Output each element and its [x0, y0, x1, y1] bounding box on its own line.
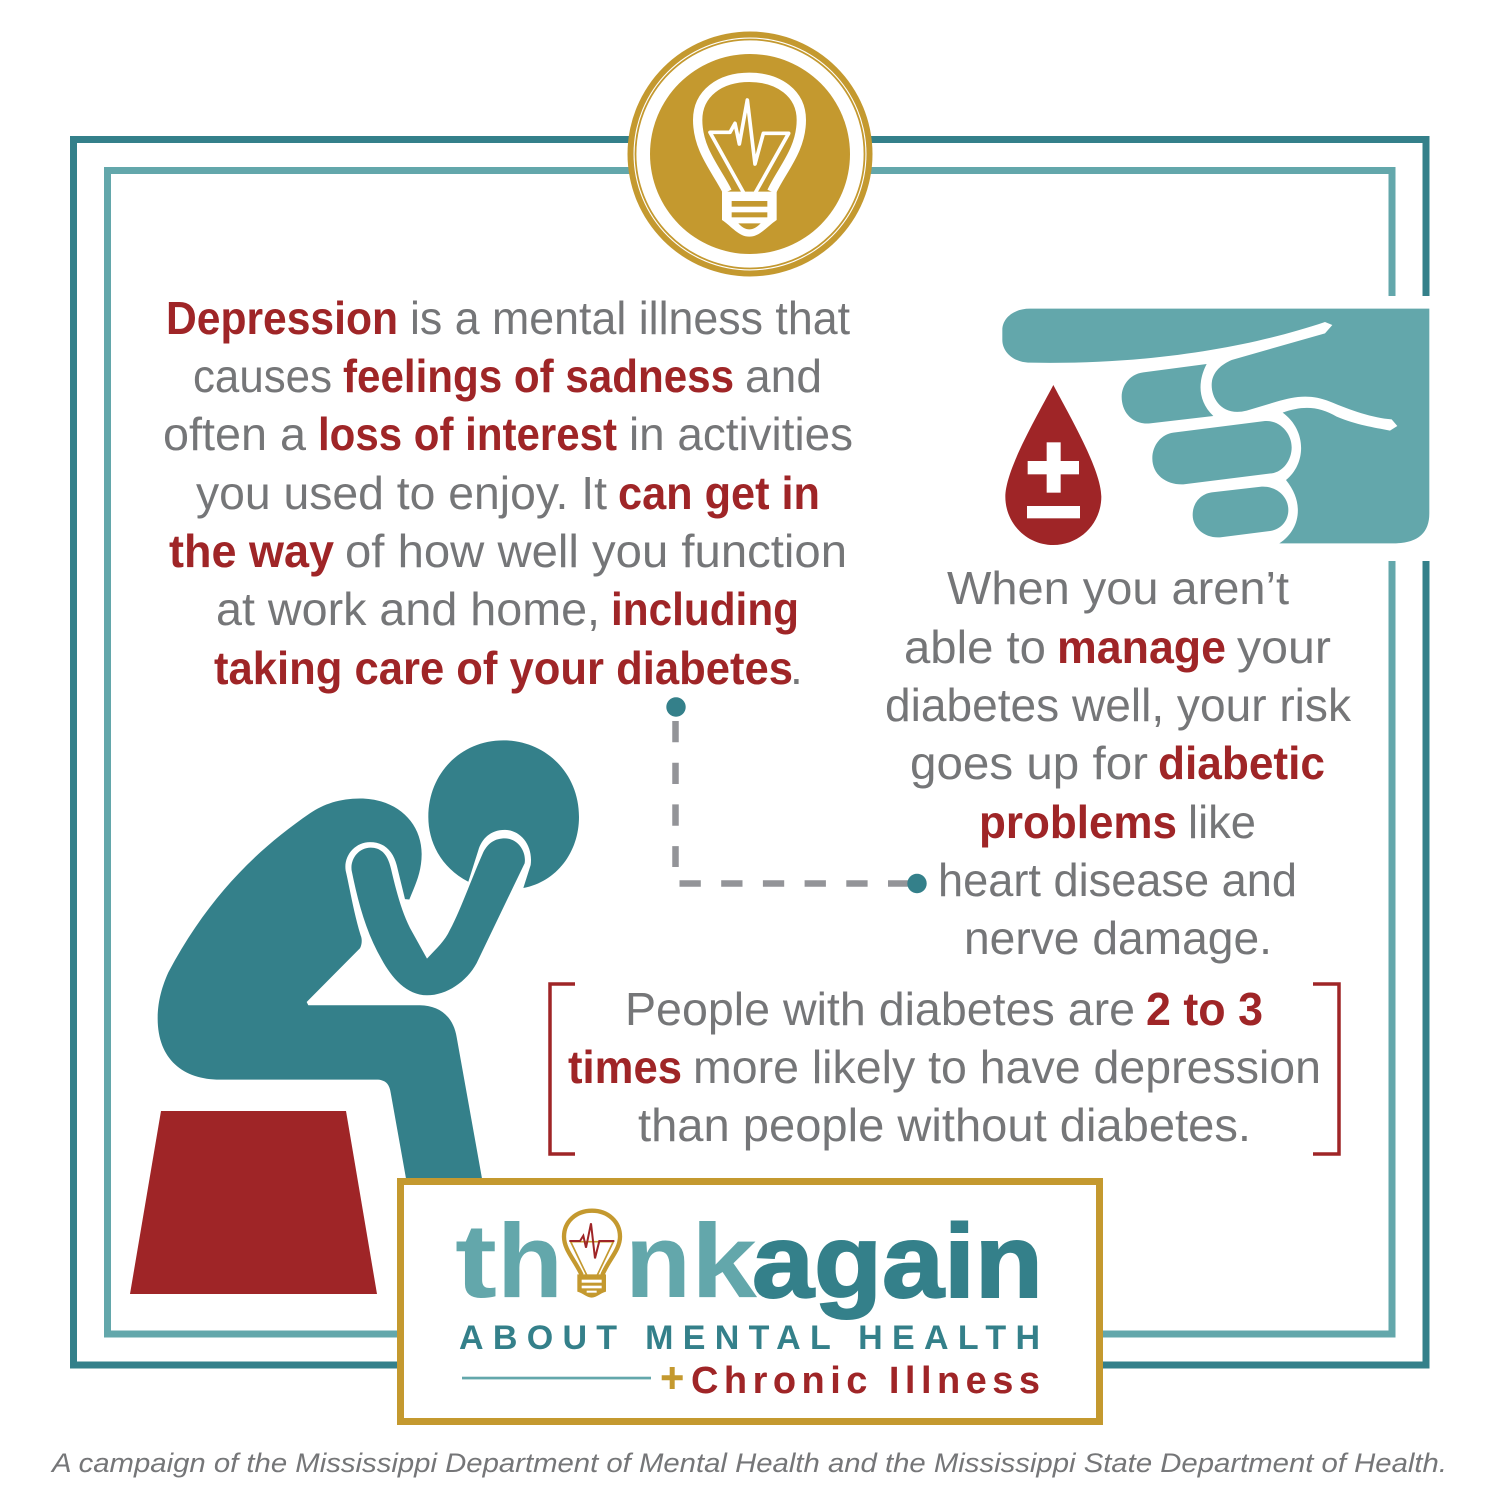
statistic text	[568, 983, 1321, 1151]
red stool	[130, 1111, 377, 1294]
paragraph: risk of diabetic problems: diabetes well, your risk	[885, 679, 1352, 731]
paragraph: what depression is: causes	[193, 350, 332, 402]
paragraph: what depression is: taking care of your diabetes	[214, 642, 793, 694]
paragraph: risk of diabetic problems: problems	[979, 796, 1177, 848]
icon: gold lightbulb badge	[628, 32, 872, 276]
paragraph: risk of diabetic problems: nerve damage.	[964, 912, 1272, 964]
logo word: nk	[625, 1203, 758, 1320]
paragraph: risk of diabetic problems: goes up for	[910, 737, 1148, 789]
outer teal frame	[74, 140, 1426, 1365]
icon: person with head in hands	[158, 740, 579, 1178]
logo word: nk: n	[625, 1203, 691, 1320]
paragraph: risk of diabetic problems: able to	[904, 621, 1046, 673]
paragraph: what depression is: often a	[163, 408, 306, 460]
paragraph: what depression is: at work and home,	[216, 583, 600, 635]
paragraph: what depression is: including	[611, 583, 799, 635]
statistic text: 2 to 3	[1146, 983, 1263, 1035]
paragraph: risk of diabetic problems	[885, 562, 1352, 964]
paragraph: what depression is: is a mental illness that	[410, 292, 850, 344]
paragraph: what depression is: loss of interest	[318, 408, 617, 460]
paragraph: risk of diabetic problems: When you aren’t	[947, 562, 1289, 614]
paragraph: what depression is: in activities	[629, 408, 853, 460]
paragraph: what depression is: of how well you function	[345, 525, 847, 577]
paragraph: what depression is: .	[790, 642, 803, 694]
icon: blood drop with plus and minus	[1005, 385, 1101, 545]
paragraph: risk of diabetic problems: manage	[1057, 621, 1226, 673]
icon: logo lightbulb	[564, 1211, 620, 1298]
footer credit: A campaign of the Mississippi Department of Mental Health and the Mississippi State Department of Health.	[50, 1448, 1447, 1478]
statistic text: more likely to have depression	[693, 1041, 1321, 1093]
logo box	[400, 1182, 1100, 1422]
paragraph: what depression is: you used to enjoy. It	[196, 467, 607, 519]
statistic text: than people without diabetes.	[638, 1099, 1251, 1151]
paragraph: risk of diabetic problems: your	[1237, 621, 1331, 673]
left bracket	[550, 984, 575, 1154]
logo subline: Chronic Illness	[691, 1360, 1040, 1402]
dashed connector between paragraphs	[666, 697, 927, 893]
logo tagline: ABOUT MENTAL HEALTH	[459, 1319, 1040, 1357]
paragraph: risk of diabetic problems: heart disease and	[938, 854, 1297, 906]
inner light teal frame	[108, 170, 1392, 1334]
icon: finger prick hand	[1002, 309, 1429, 543]
logo plus sign	[662, 1367, 683, 1389]
statistic text: People with diabetes are	[625, 983, 1135, 1035]
logo word: th	[455, 1203, 563, 1320]
paragraph: risk of diabetic problems: diabetic	[1158, 737, 1325, 789]
statistic text: times	[568, 1041, 682, 1093]
callout: 2 to 3 times statistic	[550, 983, 1339, 1154]
paragraph: what depression is: Depression	[166, 292, 398, 344]
logo word: th: t	[455, 1203, 497, 1320]
logo word: again: again	[752, 1204, 1043, 1320]
paragraph: what depression is: the way	[169, 525, 334, 577]
paragraph: what depression is: feelings of sadness	[343, 350, 734, 402]
paragraph: what depression is: and	[745, 350, 822, 402]
paragraph: risk of diabetic problems: like	[1188, 796, 1256, 848]
logo word: th: h	[497, 1203, 563, 1320]
logo word: nk: k	[691, 1203, 758, 1320]
paragraph: what depression is: can get in	[618, 467, 820, 519]
paragraph: what depression is	[163, 292, 853, 694]
right bracket	[1313, 984, 1339, 1154]
logo rule	[462, 1377, 651, 1379]
